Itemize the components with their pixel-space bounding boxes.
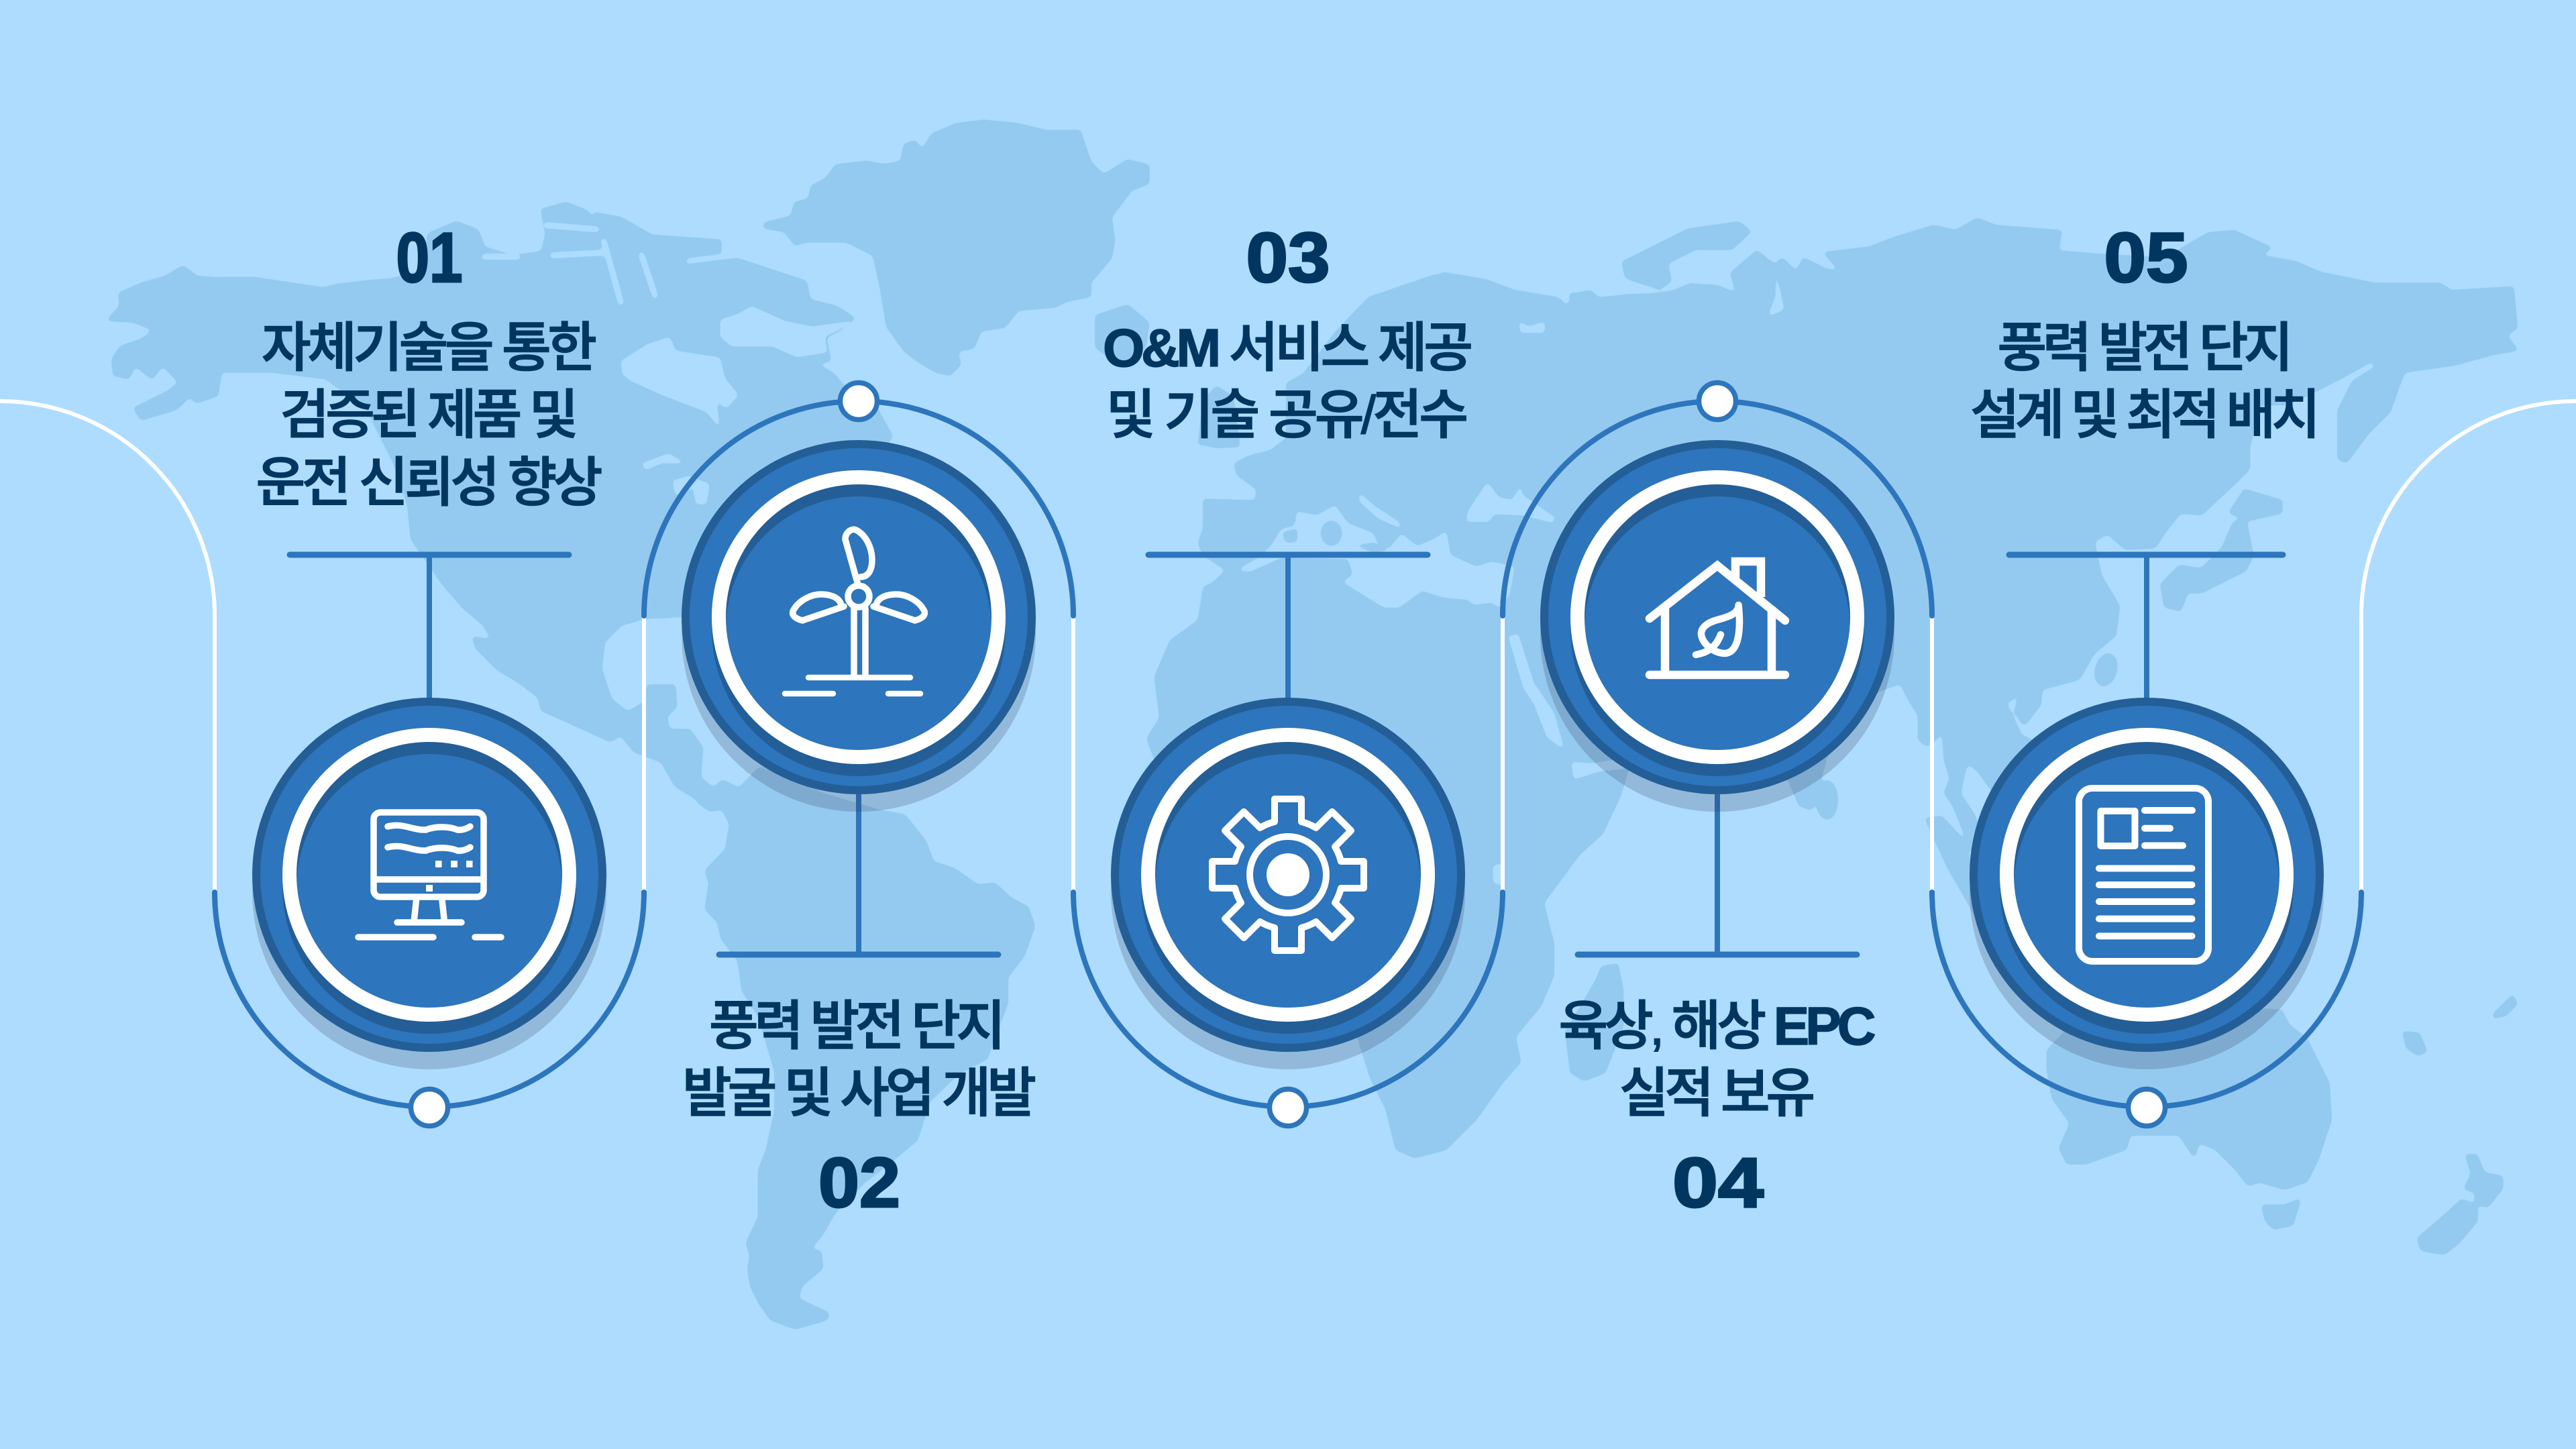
text: step 02 description: 풍력 발전 단지 [709, 996, 1006, 1056]
icon: eco house [1650, 561, 1785, 675]
connector [1578, 792, 1857, 955]
world map [109, 121, 2516, 1328]
number 02: 02 [818, 1144, 900, 1222]
node circle [252, 698, 606, 1069]
connector [2009, 555, 2283, 701]
panel: step 02 [682, 440, 1036, 1222]
arc dots [411, 382, 2165, 1126]
node circle [1111, 698, 1465, 1069]
connector [1148, 555, 1428, 701]
icon: gear [1212, 799, 1364, 951]
panel: step 04 [1540, 440, 1894, 1222]
text: step 01 description [256, 318, 602, 513]
icon: monitor [358, 812, 501, 937]
node circle [682, 440, 1036, 812]
blue arcs [215, 401, 2361, 1107]
panel: step 03 [1103, 219, 1473, 1069]
text: step 02 description: 발굴 및 사업 개발 [682, 1063, 1036, 1123]
node circle [1540, 440, 1894, 812]
text: step 03 description [1103, 318, 1473, 445]
text: step 03 description: 및 기술 공유/전수 [1106, 385, 1468, 445]
white connecting lines [0, 401, 2576, 892]
number 03: 03 [1246, 219, 1330, 297]
node circle [1970, 698, 2324, 1069]
text: step 05 description [1970, 318, 2320, 445]
text: step 05 description: 설계 및 최적 배치 [1970, 385, 2320, 445]
icon: document [2079, 788, 2208, 961]
panel: step 05 [1970, 219, 2324, 1069]
text: step 01 description: 검증된 제품 및 [280, 385, 578, 445]
number 04: 04 [1672, 1144, 1764, 1222]
text: step 01 description: 운전 신뢰성 향상 [256, 453, 602, 513]
text: step 04 description: 육상, 해상 EPC [1559, 996, 1876, 1056]
number 05: 05 [2104, 219, 2188, 297]
text: step 04 description: 실적 보유 [1619, 1063, 1815, 1123]
connector [290, 555, 569, 701]
icon: wind turbine [785, 529, 924, 694]
text: step 05 description: 풍력 발전 단지 [1998, 318, 2293, 378]
connector [719, 792, 998, 955]
text: step 04 description [1559, 996, 1876, 1123]
panel: step 01 [252, 219, 606, 1069]
text: step 03 description: O&M 서비스 제공 [1103, 318, 1473, 378]
text: step 01 description: 자체기술을 통한 [262, 318, 597, 378]
text: step 02 description [682, 996, 1036, 1123]
number 01: 01 [396, 219, 463, 297]
